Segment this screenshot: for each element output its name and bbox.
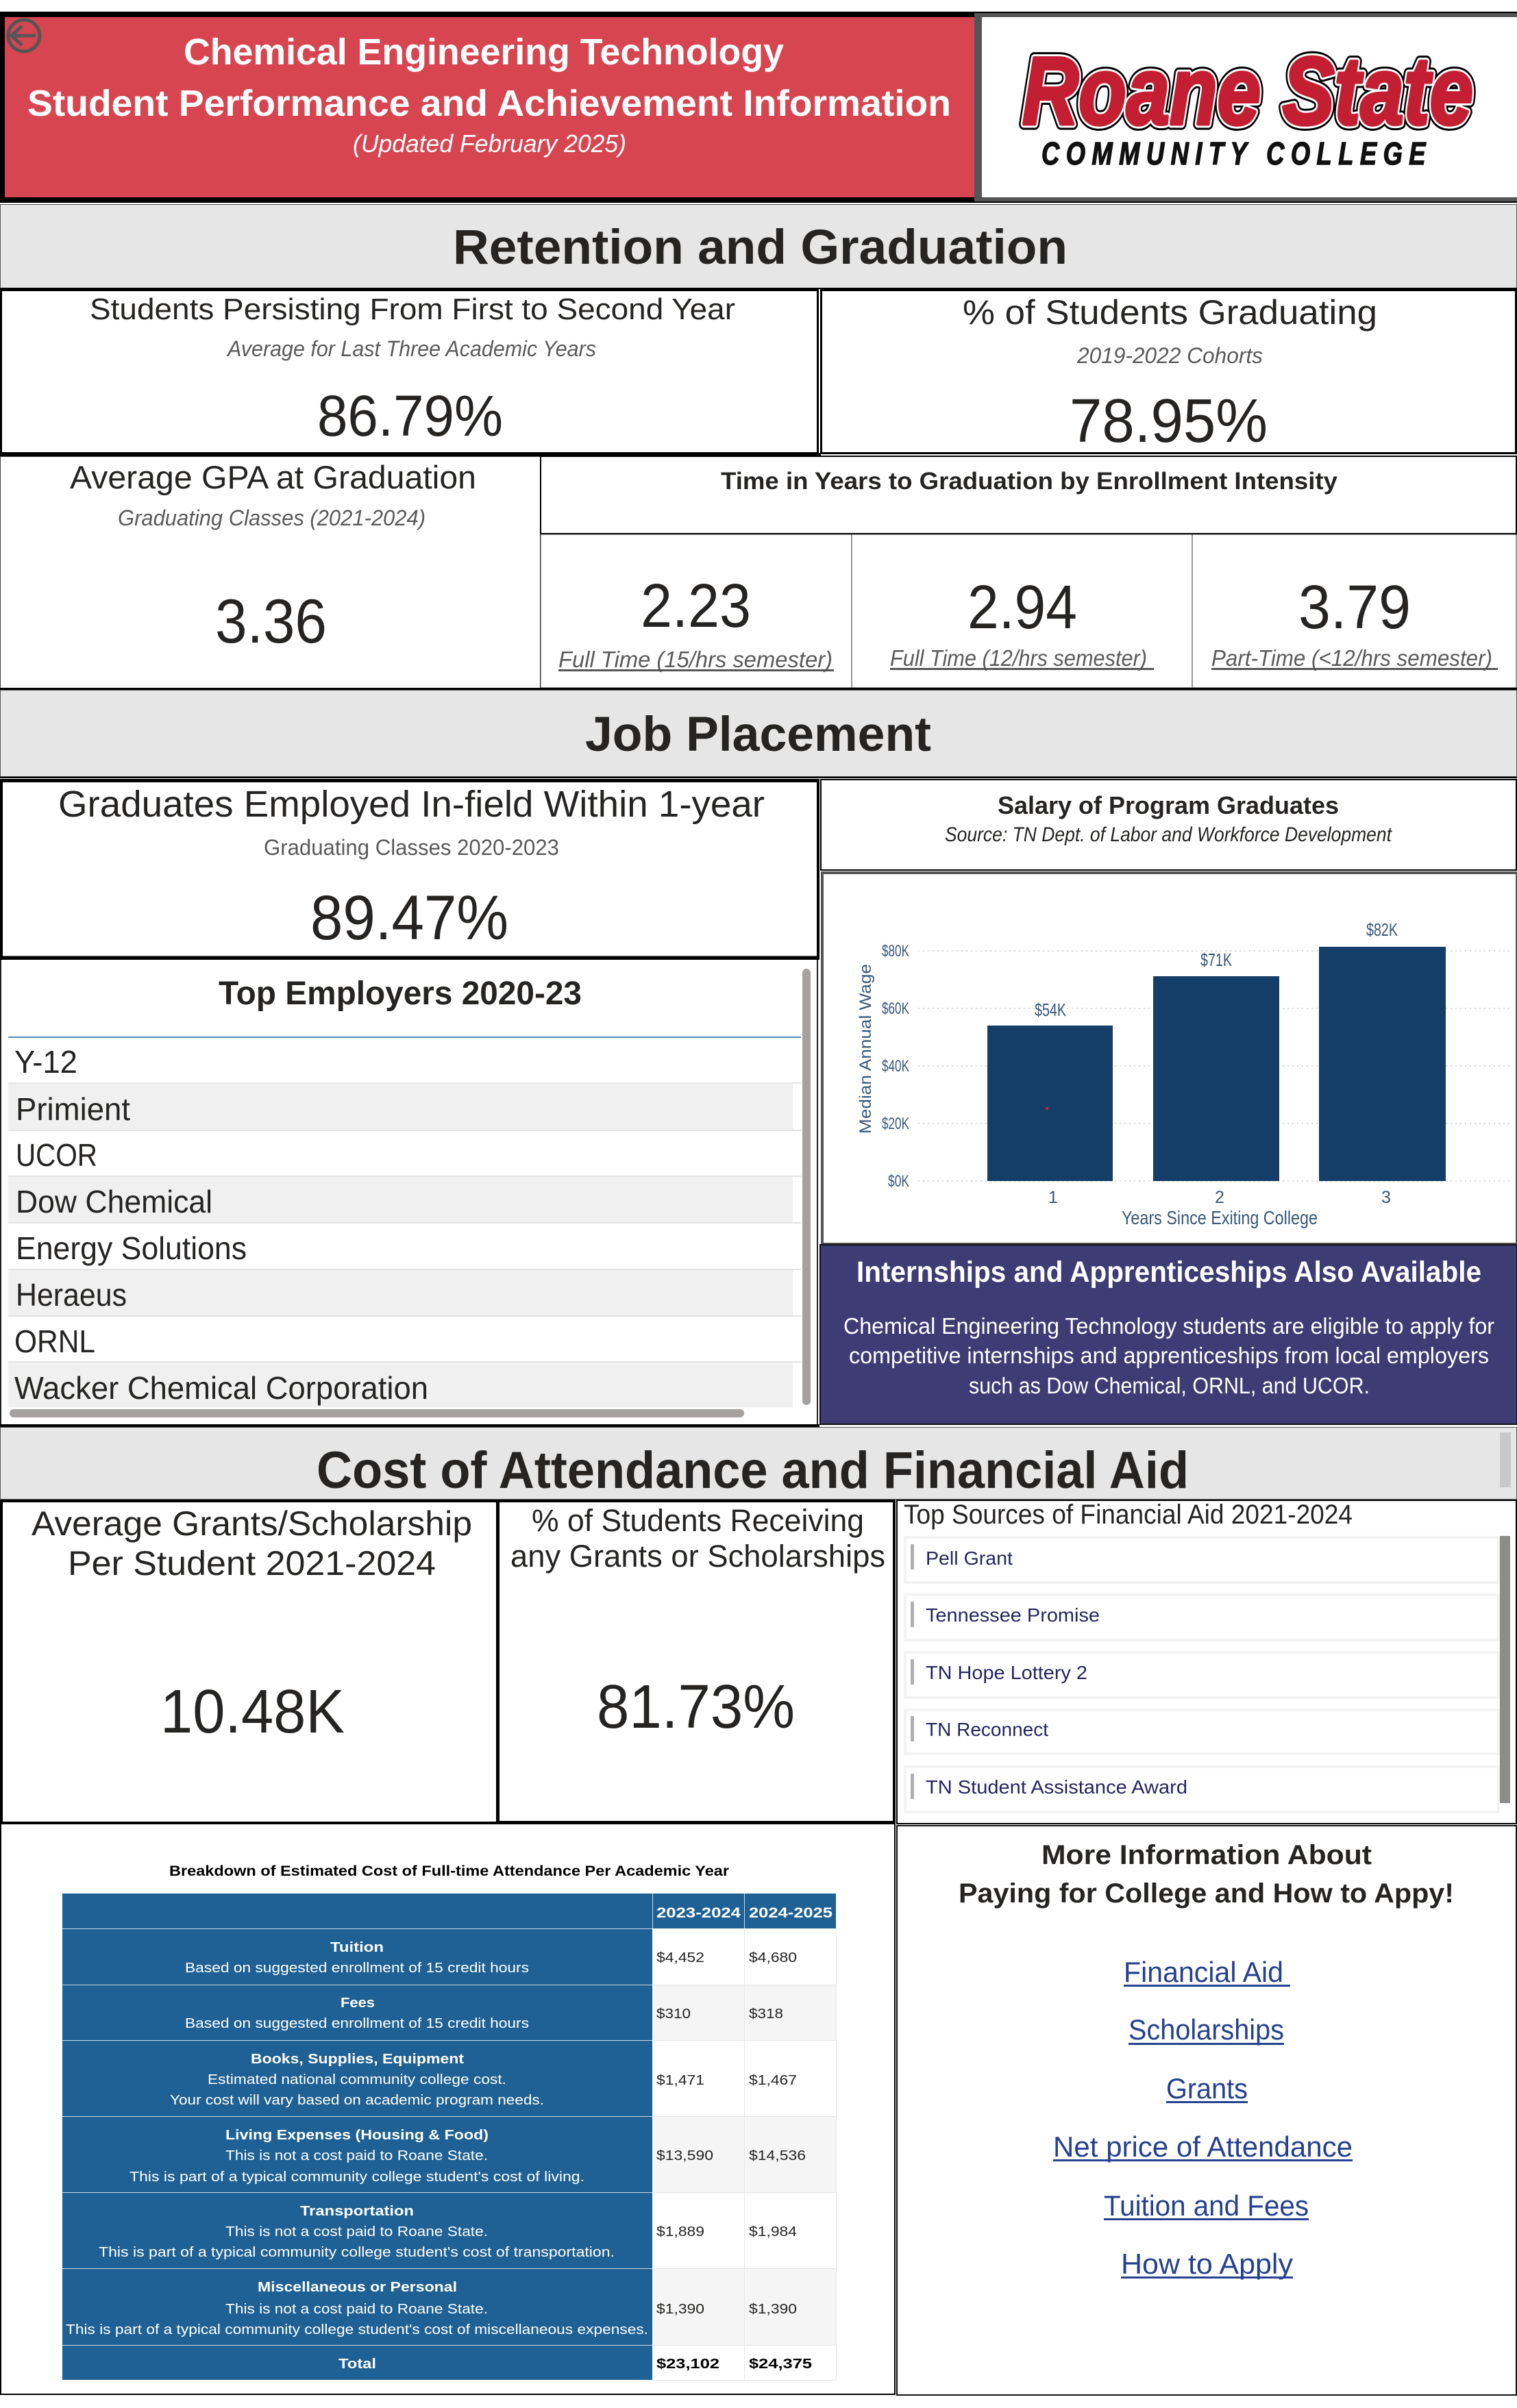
employer list: Primient (16, 1091, 130, 1127)
panel: students graduating: 78.95% (1070, 387, 1268, 456)
callout: internships (820, 1245, 1517, 1424)
table values: $1,467 (749, 2073, 797, 2088)
panel: cost breakdown table (1, 1824, 895, 2394)
section heading: Cost of Attendance and Financial Aid: Cost of Attendance and Financial Aid (317, 1441, 1189, 1500)
stat: full time 15 hrs: 2.23 (641, 572, 751, 641)
y axis title: Median Annual Wage (856, 964, 875, 1134)
row labels: Estimated national community college cost. (208, 2072, 506, 2087)
y axis labels: $0K (888, 1172, 909, 1191)
heading: Paying for College and How to Appy! (959, 1878, 1454, 1909)
panel: students persisting: 86.79% (317, 384, 503, 448)
bar chart: salary (822, 873, 1517, 1244)
y axis labels (882, 942, 909, 1191)
panel: students receiving aid: % of Students Receiving (532, 1503, 864, 1538)
panel: average GPA: Graduating Classes (2021-2024) (118, 506, 426, 530)
item: TN Student Assistance Award (905, 1767, 1498, 1812)
panel: average grants: Per Student 2021-2024 (68, 1544, 436, 1582)
panel: average grants (1, 1501, 497, 1823)
bar: year 1 (987, 1000, 1113, 1181)
y axis labels: $40K (882, 1057, 909, 1076)
panel: graduates employed (0, 779, 819, 958)
icon: back arrow (8, 20, 40, 51)
table (62, 1894, 837, 2381)
link: Grants: Grants (1166, 2072, 1248, 2105)
bar: year 3 (1319, 919, 1446, 1181)
employer list: Y-12 (14, 1044, 77, 1080)
item: TN Reconnect (905, 1710, 1498, 1754)
panel: average grants: 10.48K (160, 1678, 345, 1746)
item: TN Reconnect: TN Reconnect (926, 1719, 1048, 1740)
table title: Breakdown of Estimated Cost of Full-time Attendance Per Academic Year (169, 1863, 729, 1879)
table values: $1,889 (656, 2224, 704, 2239)
panel: average GPA (0, 456, 540, 688)
y axis labels: $20K (882, 1115, 909, 1133)
bar: year 1: $54K (1035, 1000, 1066, 1020)
section heading: Retention and Graduation: Retention and Graduation (453, 221, 1068, 275)
bar: year 2: $71K (1200, 949, 1232, 970)
item: TN Student Assistance Award: TN Student Assistance Award (926, 1776, 1187, 1798)
stat: full time 12 hrs: 2.94 (967, 573, 1077, 642)
panel: graduates employed: Graduates Employed In-field Within 1-year (58, 784, 765, 825)
row labels: Based on suggested enrollment of 15 credit hours (185, 1961, 529, 1976)
stat: full time 15 hrs (541, 534, 852, 688)
row labels: This is part of a typical community college student's cost of transportation. (99, 2245, 615, 2260)
employer list (14, 1044, 428, 1406)
item: Tennessee Promise: Tennessee Promise (926, 1604, 1100, 1626)
table values: $1,471 (656, 2073, 704, 2088)
section heading: Job Placement (0, 691, 1517, 777)
panel: students graduating: % of Students Graduating (963, 293, 1377, 332)
row labels: Total (338, 2357, 376, 2372)
y axis labels: $60K (882, 1000, 909, 1018)
employer list: Energy Solutions (16, 1230, 247, 1266)
logo panel (974, 12, 1517, 203)
x axis labels: 1 (1048, 1188, 1058, 1207)
row labels: This is not a cost paid to Roane State. (225, 2148, 488, 2163)
stat: full time 12 hrs (852, 534, 1192, 688)
table values: $13,590 (656, 2148, 713, 2163)
panel: time to graduation heading: Time in Years to Graduation by Enrollment Intensity (721, 468, 1338, 495)
y axis labels: $80K (882, 942, 909, 960)
link: Tuition and Fees: Tuition and Fees (1104, 2189, 1309, 2222)
header banner (0, 12, 982, 203)
panel: students receiving aid: any Grants or Scholarships (510, 1539, 885, 1574)
title: Student Performance and Achievement Information (27, 83, 951, 124)
panel: average GPA: Average GPA at Graduation (70, 459, 476, 495)
panel: average grants: Average Grants/Scholarship (32, 1504, 472, 1543)
item: TN Hope Lottery 2: TN Hope Lottery 2 (926, 1662, 1087, 1683)
employer list: Wacker Chemical Corporation (14, 1370, 428, 1406)
table header: 2024-2025 (749, 1905, 832, 1921)
panel: students persisting: Average for Last Three Academic Years (226, 336, 596, 361)
table values: $318 (749, 2007, 783, 2022)
panel: top employers: Top Employers 2020-23 (219, 976, 582, 1012)
row labels: This is not a cost paid to Roane State. (225, 2224, 488, 2239)
title: Chemical Engineering Technology (184, 32, 784, 73)
link: Net price of Attendance: Net price of Attendance (1053, 2131, 1353, 2163)
stat: part time: Part-Time (<12/hrs semester) (1211, 645, 1492, 671)
x axis labels: 2 (1215, 1188, 1224, 1207)
panel: top sources of aid (897, 1500, 1516, 1824)
table values: $23,102 (656, 2357, 719, 2372)
panel: graduates employed: Graduating Classes 2020-2023 (264, 835, 559, 860)
callout: internships: competitive internships and apprenticeships from local employers (849, 1343, 1489, 1368)
section heading: Job Placement: Job Placement (585, 708, 931, 762)
section heading: Cost of Attendance and Financial Aid (0, 1428, 1517, 1500)
panel: top employers (0, 957, 819, 1427)
table values: $4,452 (656, 1950, 704, 1965)
item: Tennessee Promise (905, 1595, 1498, 1640)
link: Scholarships: Scholarships (1128, 2013, 1284, 2046)
row labels: Tuition (330, 1940, 384, 1955)
panel: students persisting: Students Persisting From First to Second Year (90, 293, 735, 326)
callout: internships: Internships and Apprenticeships Also Available (856, 1256, 1481, 1289)
row labels: Your cost will vary based on academic program needs. (170, 2093, 544, 2108)
panel: more information links (897, 1826, 1516, 2395)
row labels: Books, Supplies, Equipment (251, 2052, 464, 2067)
panel: students graduating (821, 290, 1516, 456)
row labels: Transportation (300, 2204, 414, 2219)
panel: students persisting (1, 290, 818, 454)
stat: full time 15 hrs: Full Time (15/hrs semester) (558, 647, 832, 672)
row labels: This is part of a typical community college student's cost of miscellaneous expenses. (66, 2322, 648, 2337)
stat: part time (1192, 534, 1516, 688)
row labels: Based on suggested enrollment of 15 credit hours (185, 2016, 529, 2031)
table values: $4,680 (749, 1950, 797, 1965)
table values: $1,390 (656, 2302, 704, 2317)
panel: average GPA: 3.36 (215, 587, 327, 656)
panel: students graduating: 2019-2022 Cohorts (1076, 343, 1263, 368)
table values: $24,375 (749, 2357, 812, 2372)
section heading: Retention and Graduation (0, 204, 1517, 288)
panel: salary heading (821, 780, 1516, 870)
x axis labels: 3 (1381, 1188, 1391, 1207)
row labels: Miscellaneous or Personal (258, 2280, 457, 2295)
table values: $310 (656, 2007, 691, 2022)
panel: time to graduation heading (540, 456, 1517, 535)
row labels (66, 1940, 648, 2372)
stat: part time: 3.79 (1298, 573, 1411, 642)
employer list: UCOR (16, 1137, 97, 1173)
link: How to Apply: How to Apply (1121, 2248, 1293, 2280)
heading (959, 1840, 1454, 1909)
bar: year 2 (1153, 949, 1279, 1181)
table values (656, 1950, 812, 2372)
x axis title: Years Since Exiting College (1122, 1207, 1318, 1228)
item: Pell Grant: Pell Grant (926, 1548, 1013, 1569)
row labels: Living Expenses (Housing & Food) (225, 2128, 489, 2143)
title: (Updated February 2025) (353, 129, 626, 158)
table values: $1,390 (749, 2302, 797, 2317)
item: Pell Grant (905, 1537, 1498, 1582)
row labels: This is not a cost paid to Roane State. (225, 2302, 488, 2317)
bar: year 3: $82K (1366, 919, 1398, 940)
row labels: Fees (341, 1996, 375, 2011)
panel: students receiving aid: 81.73% (597, 1673, 795, 1741)
employer list: Dow Chemical (16, 1184, 212, 1219)
x axis labels (1048, 1188, 1391, 1207)
table values: $14,536 (749, 2148, 806, 2163)
table header: 2023-2024 (656, 1905, 741, 1921)
employer list: ORNL (14, 1324, 95, 1359)
callout: internships: such as Dow Chemical, ORNL, and UCOR. (969, 1373, 1370, 1398)
panel: top sources of aid: Top Sources of Financial Aid 2021-2024 (904, 1500, 1353, 1530)
panel: salary heading: Salary of Program Graduates (998, 791, 1339, 819)
row labels: This is part of a typical community college student's cost of living. (130, 2170, 584, 2185)
title (27, 32, 951, 158)
link: Financial Aid: Financial Aid (1124, 1956, 1283, 1988)
callout: internships: Chemical Engineering Technology students are eligible to apply for (843, 1313, 1494, 1339)
item: TN Hope Lottery 2 (905, 1652, 1498, 1698)
table header (656, 1905, 832, 1921)
panel: salary heading: Source: TN Dept. of Labor and Workforce Development (945, 823, 1392, 846)
table values: $1,984 (749, 2224, 797, 2239)
panel: graduates employed: 89.47% (310, 883, 508, 953)
heading: More Information About (1041, 1840, 1372, 1870)
panel: students receiving aid (498, 1501, 894, 1822)
employer list: Heraeus (16, 1277, 127, 1313)
stat: full time 12 hrs: Full Time (12/hrs semester) (890, 645, 1147, 671)
